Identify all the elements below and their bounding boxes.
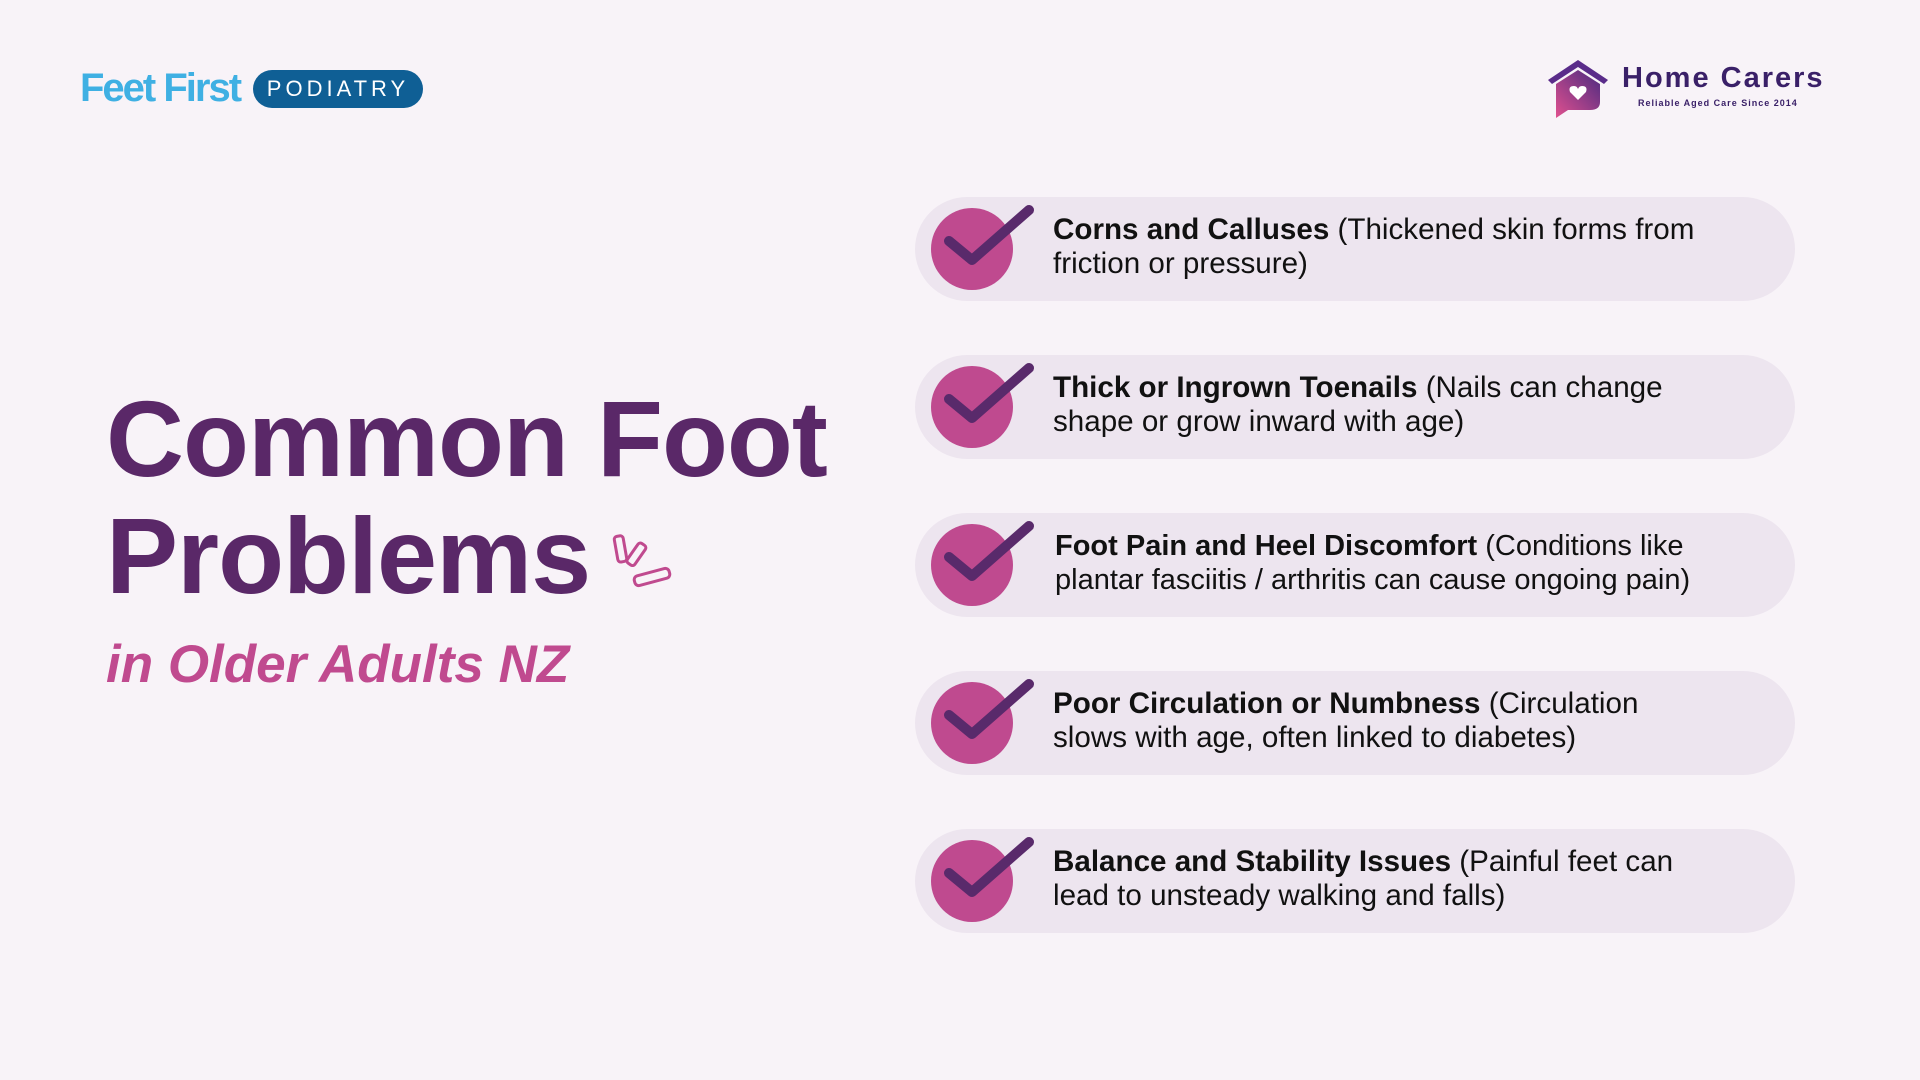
- logo: Home Carers: [1548, 60, 1825, 118]
- logo: Home Carers: Home Carers: [1622, 62, 1825, 94]
- list item 4: Poor Circulation or Numbness (Circulation: [1053, 687, 1638, 720]
- title: [106, 378, 827, 616]
- title: Common Foot: [106, 378, 827, 499]
- list item 5: [915, 829, 1795, 933]
- list item 5: lead to unsteady walking and falls): [1053, 879, 1505, 912]
- list item 2: shape or grow inward with age): [1053, 405, 1464, 438]
- list item 2: [915, 355, 1795, 459]
- list item 1: friction or pressure): [1053, 247, 1308, 280]
- title: Problems: [106, 495, 590, 616]
- list item 3: plantar fasciitis / arthritis can cause ongoing pain): [1055, 564, 1690, 596]
- list item 5: Balance and Stability Issues (Painful feet can: [1053, 845, 1673, 878]
- list item 4: [915, 671, 1795, 775]
- logo: Feet First Podiatry: PODIATRY: [267, 76, 409, 101]
- list item 2: Thick or Ingrown Toenails (Nails can change: [1053, 371, 1663, 404]
- list item 4: slows with age, often linked to diabetes): [1053, 721, 1576, 754]
- logo: Home Carers: Reliable Aged Care Since 2014: [1638, 98, 1798, 108]
- logo: Feet First Podiatry: Feet First: [80, 66, 240, 110]
- list item 1: Corns and Calluses (Thickened skin forms from: [1053, 213, 1694, 246]
- logo: Feet First Podiatry: [80, 66, 423, 110]
- subtitle: in Older Adults NZ: [106, 635, 569, 694]
- list item 1: [915, 197, 1795, 301]
- icon: sparkle strokes: [612, 534, 672, 588]
- list item 3: Foot Pain and Heel Discomfort (Conditions like: [1055, 530, 1684, 562]
- list item 3: [915, 513, 1795, 617]
